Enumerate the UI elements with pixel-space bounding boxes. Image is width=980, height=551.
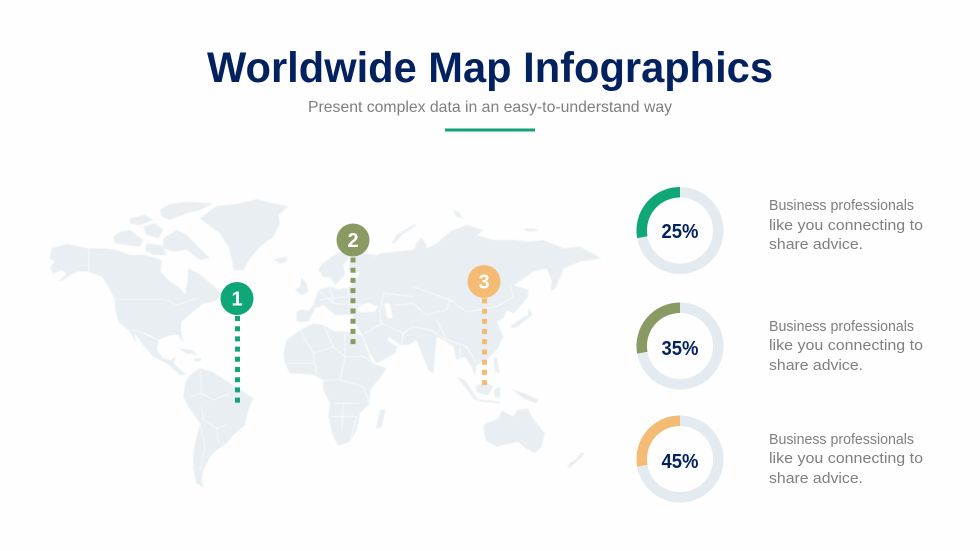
marker 2 number: 2: [347, 230, 359, 252]
map: North America: [49, 244, 222, 375]
marker 3 dotted line: [482, 298, 487, 386]
map: Old World: [283, 210, 602, 468]
description 2: like you connecting to: [769, 337, 923, 354]
map: Indonesia and Philippines: [457, 357, 538, 403]
map: New Zealand: [567, 452, 584, 468]
marker 3 number: 3: [478, 272, 490, 294]
description 3: share advice.: [769, 470, 863, 487]
map: Sakhalin: [551, 267, 564, 292]
donut chart 35%: [642, 308, 718, 384]
marker 2 circle: [336, 224, 370, 256]
donut chart 45%: [642, 421, 718, 497]
map: United Kingdom: [295, 277, 308, 295]
map: Africa: [283, 323, 387, 446]
marker 2 dotted line: [350, 258, 356, 344]
marker 2: [336, 224, 370, 344]
description 3: [769, 431, 923, 487]
description 1: like you connecting to: [769, 217, 923, 234]
map: Caspian Sea: [384, 303, 393, 318]
map: Iceland: [273, 257, 287, 264]
description 3: like you connecting to: [769, 450, 923, 467]
map: Australia: [483, 408, 545, 453]
marker 1 dotted line: [235, 316, 240, 403]
marker 1 circle: [220, 282, 254, 315]
title underline accent: [445, 128, 535, 132]
map: American borders: [89, 248, 230, 470]
map: Caribbean islands: [178, 348, 202, 362]
description 1: Business professionals: [769, 197, 914, 214]
description 3: Business professionals: [769, 431, 914, 448]
world map: [49, 199, 602, 487]
map: Americas and Greenland: [49, 199, 288, 487]
donut chart 45%: 45%: [662, 451, 699, 473]
map: South America: [183, 368, 253, 487]
donut chart 25%: 25%: [662, 221, 699, 243]
map: Svalbard and Arctic islands: [415, 210, 540, 255]
map: Greenland: [200, 199, 288, 271]
map: Madagascar: [376, 409, 385, 428]
map: Novaya Zemlya: [392, 224, 416, 243]
title: Worldwide Map Infographics: [207, 44, 773, 92]
subtitle: Present complex data in an easy-to-understand way: [308, 99, 672, 116]
map: Canadian arctic islands: [113, 202, 213, 260]
map: Old World borders: [287, 285, 513, 442]
map: Eurasia: [297, 225, 602, 377]
marker 1 number: 1: [231, 288, 243, 310]
description 2: Business professionals: [769, 318, 914, 335]
donut chart 35%: 35%: [662, 338, 699, 360]
map: Persian Gulf: [387, 337, 400, 347]
donut chart 25%: [642, 192, 718, 269]
map: Scandinavia: [318, 246, 360, 285]
description 2: share advice.: [769, 357, 863, 374]
map: Black Sea: [357, 303, 378, 313]
map: Japan: [510, 307, 532, 328]
description 1: share advice.: [769, 236, 863, 253]
marker 1: [220, 282, 254, 403]
description 1: [769, 197, 923, 253]
marker 3: [468, 265, 500, 386]
description 2: [769, 318, 923, 374]
marker 3 circle: [468, 265, 500, 298]
